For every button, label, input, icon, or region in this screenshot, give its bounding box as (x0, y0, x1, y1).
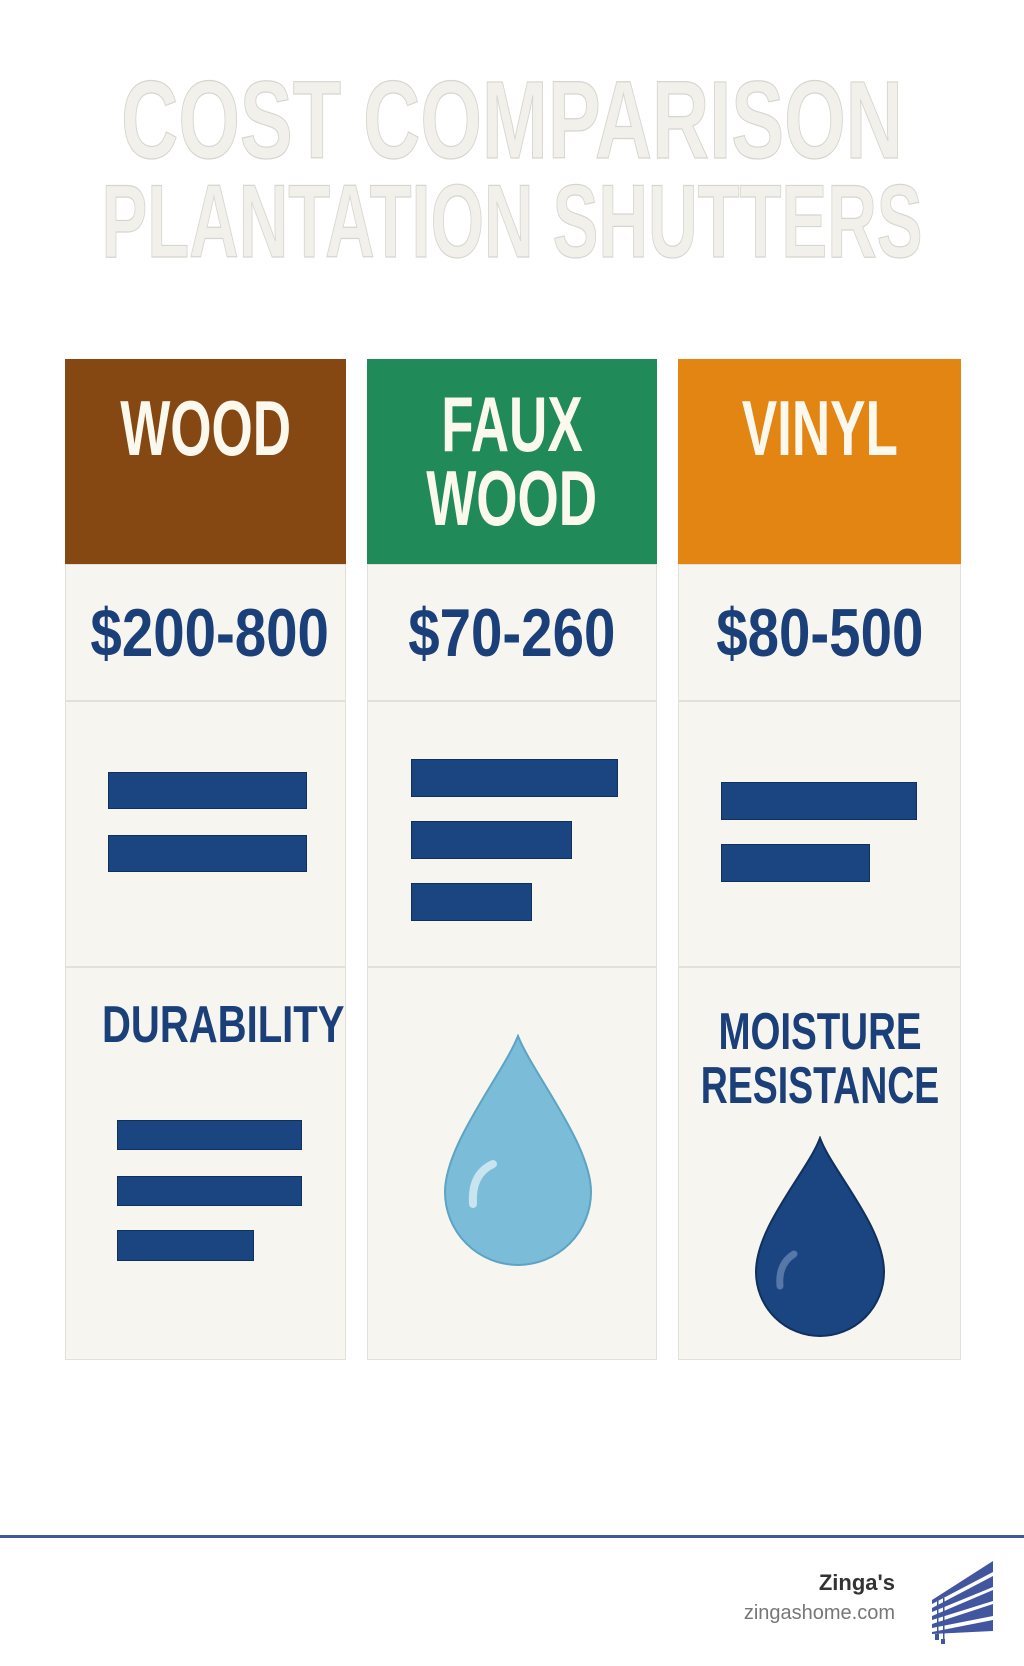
icon: blinds logo (932, 1561, 993, 1644)
durability block (65, 967, 346, 1360)
header: vinyl (678, 359, 961, 564)
panel: vinyl (678, 359, 961, 1360)
moisture block (678, 967, 961, 1360)
brand text: zingashome.com (744, 1602, 895, 1624)
header: faux wood: FAUX (441, 380, 583, 468)
price: vinyl (678, 564, 961, 701)
title (101, 59, 923, 280)
price: faux wood (367, 564, 657, 701)
bars: vinyl (678, 701, 961, 967)
bars: faux wood (367, 701, 657, 967)
title: PLANTATION SHUTTERS (101, 164, 923, 280)
icon: light drop (444, 1034, 592, 1266)
header: faux wood (367, 359, 657, 564)
moisture block: MOISTURE (718, 1003, 921, 1061)
price: faux wood: $70-260 (408, 595, 616, 671)
price: wood: $200-800 (90, 595, 329, 671)
bars: wood (65, 701, 346, 967)
header: vinyl: VINYL (741, 384, 898, 472)
panel: wood (65, 359, 346, 1360)
price: vinyl: $80-500 (716, 595, 923, 671)
price: wood (65, 564, 346, 701)
panel: faux wood (367, 359, 657, 1360)
title: COST COMPARISON (121, 59, 903, 182)
brand text: Zinga's (819, 1570, 895, 1595)
drop block (367, 967, 657, 1360)
icon: dark drop (755, 1136, 885, 1337)
header: wood (65, 359, 346, 564)
header: faux wood: WOOD (427, 454, 597, 542)
footer line (0, 1535, 1024, 1538)
brand text (744, 1570, 895, 1624)
header: wood: WOOD (120, 384, 291, 472)
moisture block: RESISTANCE (700, 1057, 939, 1115)
durability block: DURABILITY (102, 996, 344, 1054)
